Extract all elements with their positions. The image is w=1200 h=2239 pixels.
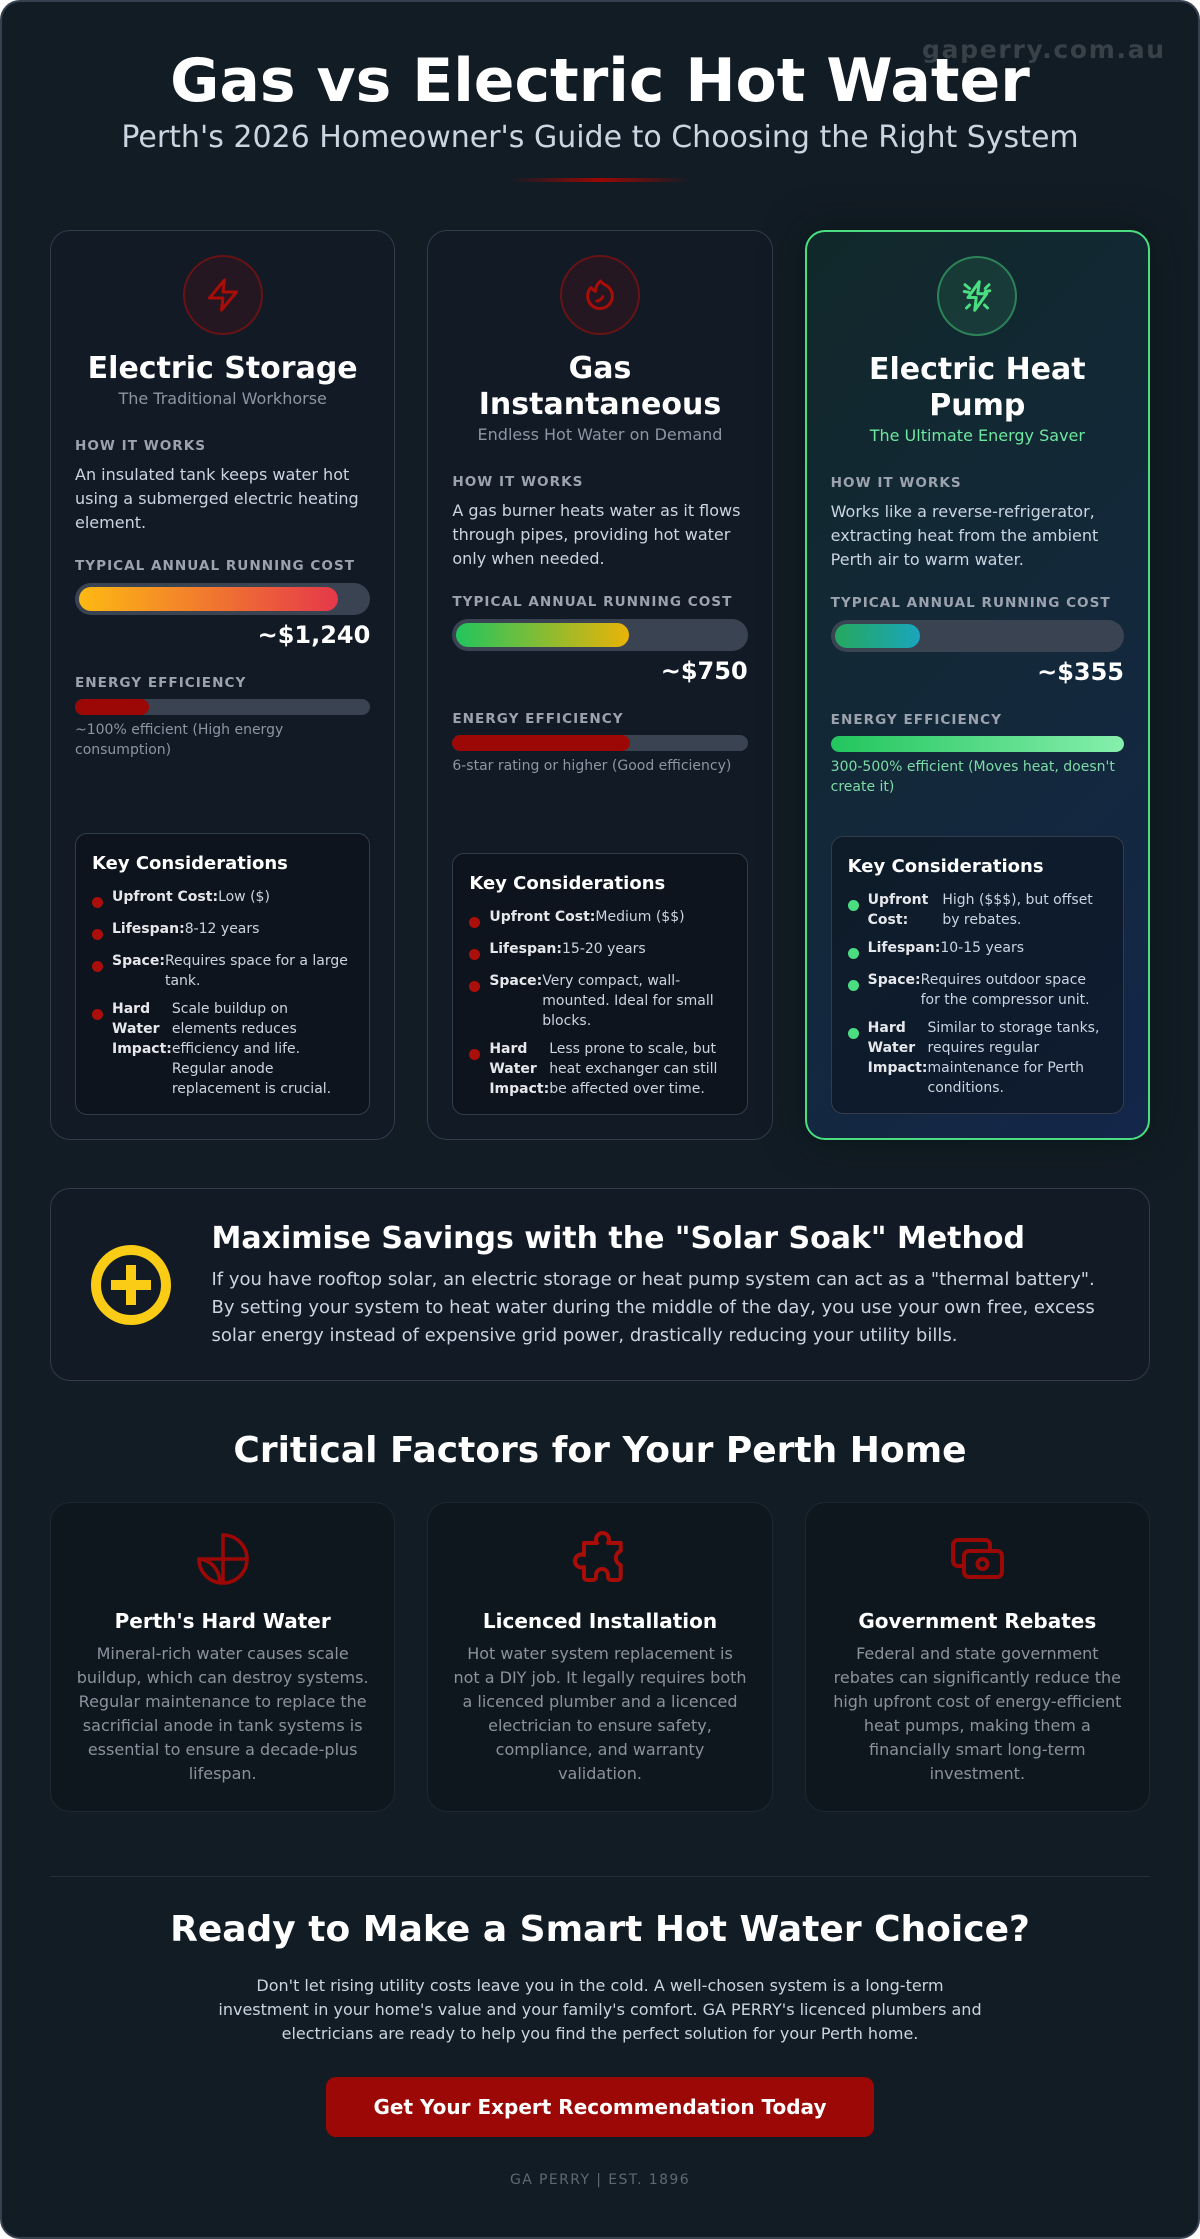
considerations list: Lifespan: — [489, 941, 562, 957]
critical factors heading: Critical Factors for Your Perth Home — [233, 1430, 967, 1471]
call to action text — [218, 1976, 982, 2043]
key considerations — [831, 836, 1124, 1114]
watermark: gaperry.com.au — [922, 35, 1166, 64]
considerations list — [469, 909, 717, 1097]
efficiency note: 300-500% efficient (Moves heat, doesn't create it) — [831, 759, 1115, 795]
efficiency bar — [452, 735, 748, 751]
label: running cost: TYPICAL ANNUAL RUNNING COST — [452, 594, 732, 610]
panel: electric storage — [50, 230, 395, 1140]
solar soak heading: Maximise Savings with the "Solar Soak" Method — [212, 1221, 1025, 1256]
label: how it works: HOW IT WORKS — [452, 474, 583, 490]
icon: banknotes — [951, 1538, 1004, 1579]
considerations list: 8-12 years — [185, 921, 259, 937]
card tagline: The Ultimate Energy Saver — [870, 426, 1085, 445]
running cost bar — [452, 619, 748, 651]
considerations list: Requires outdoor space for the compressor unit. — [921, 972, 1090, 1008]
factor heading: Government Rebates — [858, 1609, 1096, 1633]
considerations list: Scale buildup on elements reduces efficiency and life. Regular anode replacement is crucial. — [172, 1001, 331, 1097]
considerations list: Upfront Cost: — [489, 909, 595, 925]
solar soak text: By setting your system to heat water during the middle of the day, you use your own free, excess — [212, 1297, 1095, 1318]
title: Gas vs Electric Hot Water — [170, 46, 1030, 116]
icon: puzzle piece — [573, 1531, 623, 1582]
efficiency bar — [75, 699, 370, 715]
considerations list: Very compact, wall-mounted. Ideal for small blocks. — [542, 973, 714, 1029]
running cost value: ~$355 — [1037, 658, 1124, 686]
considerations list: 10-15 years — [940, 940, 1024, 956]
considerations list: Space: — [489, 973, 542, 989]
factor heading: Licenced Installation — [483, 1609, 717, 1633]
description: An insulated tank keeps water hot using a submerged electric heating element. — [75, 465, 359, 532]
panel: gas instantaneous — [427, 230, 773, 1140]
icon: bolt with sparks — [937, 256, 1017, 336]
panel: solar soak callout — [50, 1188, 1150, 1381]
call to action text: investment in your home's value and your family's comfort. GA PERRY's licenced plumbers and — [218, 2000, 982, 2019]
factor heading: Perth's Hard Water — [115, 1609, 331, 1633]
key considerations heading: Key Considerations — [469, 873, 665, 894]
considerations list: Hard Water Impact: — [489, 1041, 549, 1097]
label: how it works: HOW IT WORKS — [75, 438, 206, 454]
running cost value: ~$750 — [661, 657, 748, 685]
solar soak text: solar energy instead of expensive grid power, drastically reducing your utility bills. — [212, 1325, 957, 1346]
icon: plus in circle — [91, 1245, 171, 1325]
header divider — [510, 178, 690, 182]
description: A gas burner heats water as it flows through pipes, providing hot water only when needed. — [452, 501, 740, 568]
considerations list: Medium ($$) — [595, 909, 685, 925]
considerations list: Similar to storage tanks, requires regular maintenance for Perth conditions. — [928, 1020, 1099, 1096]
factor text: Mineral-rich water causes scale buildup, which can destroy systems. Regular maintenance to replace the sacrificial anode in tank systems is essential to ensure a decade-plus lifespan. — [77, 1644, 369, 1783]
considerations list: Hard Water Impact: — [868, 1020, 928, 1076]
subtitle: Perth's 2026 Homeowner's Guide to Choosing the Right System — [121, 120, 1079, 155]
label: energy efficiency: ENERGY EFFICIENCY — [75, 675, 246, 691]
considerations list: Hard Water Impact: — [112, 1001, 172, 1057]
label: how it works: HOW IT WORKS — [831, 475, 962, 491]
icon: lightning bolt — [183, 255, 263, 335]
call to action heading: Ready to Make a Smart Hot Water Choice? — [170, 1909, 1030, 1950]
call to action button — [326, 2077, 874, 2137]
label: energy efficiency: ENERGY EFFICIENCY — [831, 712, 1002, 728]
call to action text: electricians are ready to help you find the perfect solution for your Perth home. — [282, 2024, 918, 2043]
factor text: Hot water system replacement is not a DIY job. It legally requires both a licenced plumber and a licenced electrician to ensure safety, compliance, and warranty validation. — [453, 1644, 747, 1783]
considerations list: Lifespan: — [112, 921, 185, 937]
call to action text: Don't let rising utility costs leave you in the cold. A well-chosen system is a long-term — [256, 1976, 944, 1995]
card tagline: The Traditional Workhorse — [118, 389, 327, 408]
running cost bar — [831, 620, 1124, 652]
solar soak text: If you have rooftop solar, an electric storage or heat pump system can act as a "thermal battery". — [212, 1269, 1095, 1290]
considerations list: Space: — [868, 972, 921, 988]
running cost value: ~$1,240 — [258, 621, 370, 649]
key considerations — [75, 833, 370, 1115]
description: Works like a reverse-refrigerator, extracting heat from the ambient Perth air to warm water. — [831, 502, 1098, 569]
card tagline: Endless Hot Water on Demand — [478, 425, 722, 444]
considerations list: Space: — [112, 953, 165, 969]
panel: hard water — [50, 1502, 395, 1812]
considerations list: Low ($) — [218, 889, 270, 905]
factor text: Federal and state government rebates can significantly reduce the high upfront cost of energy-efficient heat pumps, making them a financially smart long-term investment. — [833, 1644, 1121, 1783]
efficiency bar — [831, 736, 1124, 752]
card heading: Electric Heat Pump — [869, 352, 1086, 423]
icon: pie chart — [197, 1533, 249, 1585]
panel: electric heat pump — [805, 230, 1150, 1140]
label: running cost: TYPICAL ANNUAL RUNNING COST — [831, 595, 1111, 611]
considerations list: High ($$$), but offset by rebates. — [942, 892, 1093, 928]
footer: GA PERRY | EST. 1896 — [510, 2172, 690, 2188]
efficiency note: 6-star rating or higher (Good efficiency) — [452, 758, 731, 774]
icon: flame — [560, 255, 640, 335]
card heading: Gas Instantaneous — [479, 351, 721, 422]
considerations list: Less prone to scale, but heat exchanger can still be affected over time. — [549, 1041, 717, 1097]
label: energy efficiency: ENERGY EFFICIENCY — [452, 711, 624, 727]
panel: government rebates — [805, 1502, 1150, 1812]
efficiency note: ~100% efficient (High energy consumption) — [75, 722, 283, 758]
key considerations — [452, 853, 748, 1115]
key considerations heading: Key Considerations — [848, 856, 1044, 877]
considerations list: Requires space for a large tank. — [165, 953, 348, 989]
running cost bar — [75, 583, 370, 615]
considerations list — [92, 889, 348, 1097]
considerations list — [848, 892, 1099, 1096]
label: running cost: TYPICAL ANNUAL RUNNING COST — [75, 558, 355, 574]
panel: licenced installation — [427, 1502, 773, 1812]
considerations list: Lifespan: — [868, 940, 940, 956]
card heading: Electric Storage — [88, 351, 358, 386]
considerations list: 15-20 years — [562, 941, 646, 957]
call to action button: Get Your Expert Recommendation Today — [374, 2095, 826, 2119]
solar soak text — [212, 1269, 1095, 1346]
considerations list: Upfront Cost: — [868, 892, 928, 928]
key considerations heading: Key Considerations — [92, 853, 288, 874]
considerations list: Upfront Cost: — [112, 889, 218, 905]
